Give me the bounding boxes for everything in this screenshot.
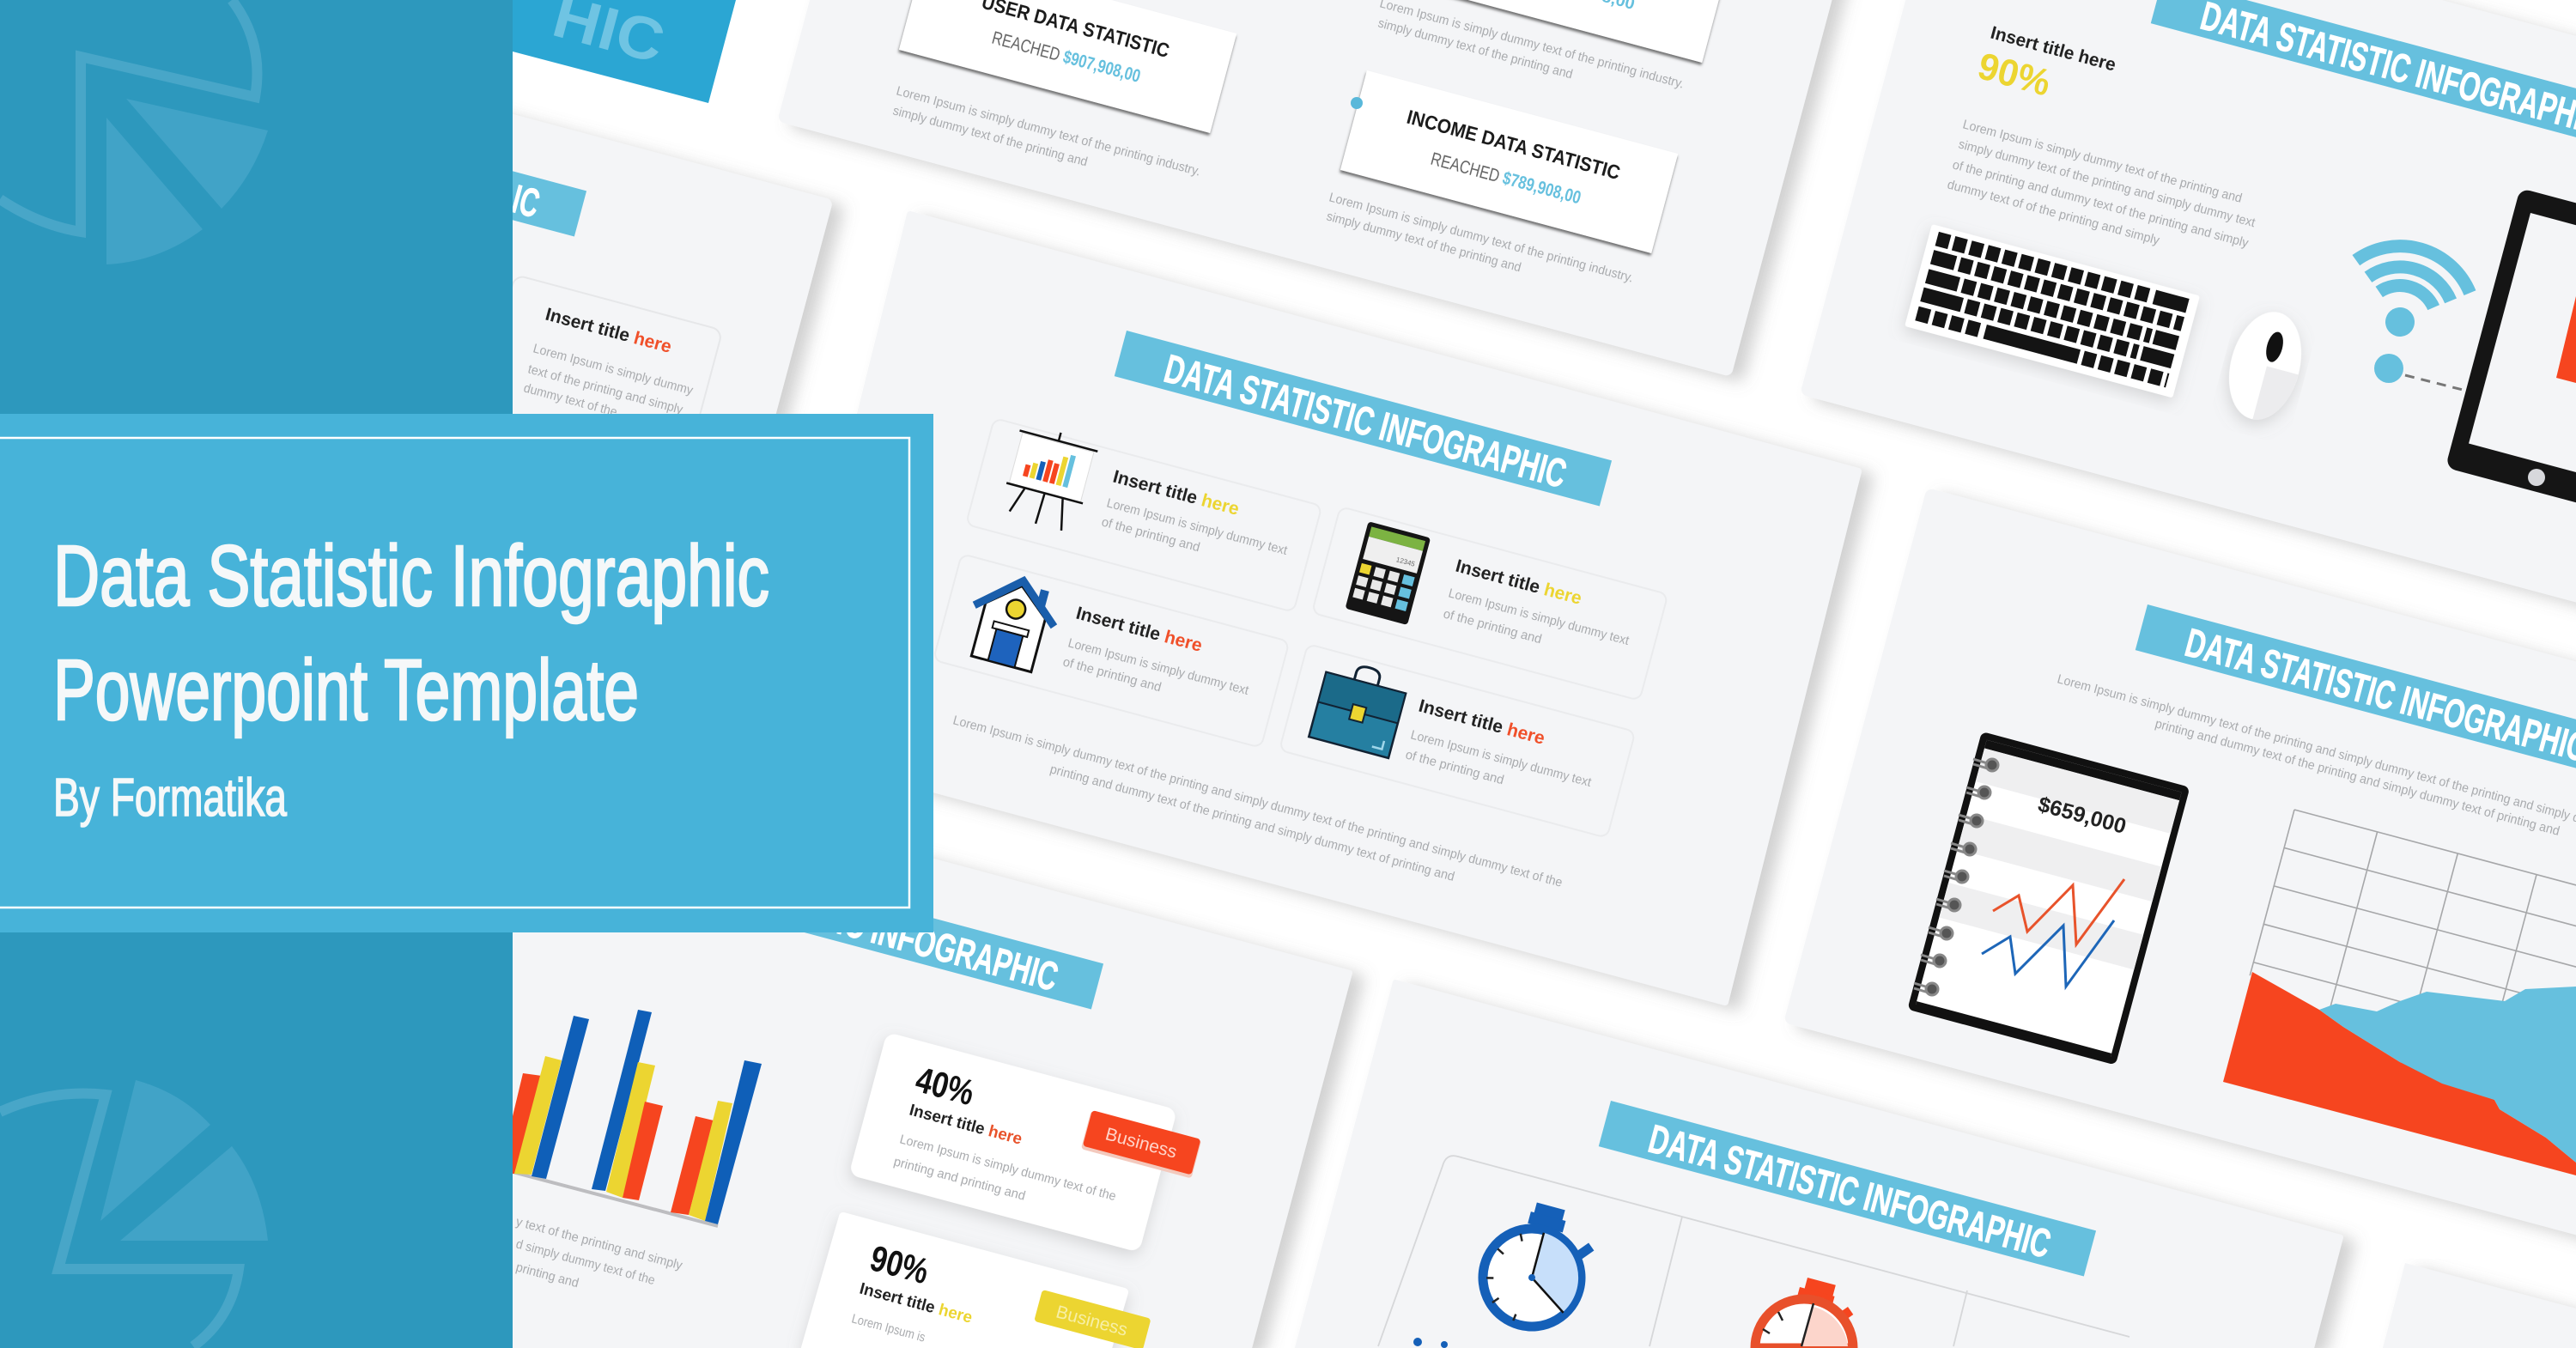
icon: tablet xyxy=(2445,188,2576,579)
body text: Lorem Ipsum is simply dummy text of the printing industry. xyxy=(895,83,1202,179)
banner xyxy=(1115,331,1612,507)
card 2: calculator: Insert title here xyxy=(1454,556,1584,609)
card: income data: REACHED $789,908,00 xyxy=(1429,149,1583,208)
card: 40%: printing and printing and xyxy=(892,1154,1027,1204)
button: business yellow xyxy=(1034,1290,1151,1348)
paragraph xyxy=(1946,117,2257,251)
connector dot and dashed line xyxy=(2374,354,2463,390)
body text: simply dummy text of the printing and xyxy=(1376,15,1574,82)
icon: stopwatch red xyxy=(1755,1278,1853,1348)
slide: notebook and area chart xyxy=(1783,488,2576,1274)
icon: calculator: 12345 xyxy=(1395,556,1416,568)
banner: DATA STATISTIC INFOGRAPHIC xyxy=(1160,345,1571,496)
button: business red: Business xyxy=(1103,1124,1179,1163)
icon: keyboard xyxy=(1905,224,2200,398)
banner: DATA STATISTIC INFOGRAPHIC xyxy=(1644,1115,2056,1266)
chart caption: printing and xyxy=(514,1260,580,1290)
stat title: Insert title here xyxy=(1989,23,2118,76)
button: business red xyxy=(1081,1110,1202,1179)
card 2: calculator: Lorem Ipsum is simply dummy text xyxy=(1447,586,1631,648)
left column xyxy=(0,0,513,1348)
banner xyxy=(1599,1101,2096,1278)
paragraph: printing and dummy text of the printing and simply dummy text of printing and xyxy=(2154,716,2561,839)
card 1: presentation: of the printing and xyxy=(1100,514,1201,555)
byline: By Formatika xyxy=(53,768,287,828)
body text: simply dummy text of the printing and xyxy=(1325,209,1522,275)
amount: $659,000 xyxy=(2035,792,2129,839)
card: user data: REACHED $907,908,00 xyxy=(990,28,1143,87)
slide: center, four cards xyxy=(777,215,1858,1002)
icon: house xyxy=(962,570,1063,675)
banner: DATA STATISTIC INFOGRAPHIC xyxy=(652,848,1063,999)
paragraph: simply dummy text of the printing and simply dummy text xyxy=(1957,137,2257,230)
banner xyxy=(606,834,1103,1011)
banner: IC xyxy=(507,176,544,227)
area blue xyxy=(2319,987,2576,1163)
decoration: top pie chart xyxy=(0,0,268,264)
card outline xyxy=(459,275,722,537)
card: 40% xyxy=(848,1032,1202,1253)
card: income data: INCOME DATA STATISTIC xyxy=(1405,106,1623,184)
icon: easel xyxy=(998,422,1100,534)
chart caption: y text of the printing and simply xyxy=(514,1214,684,1273)
paragraph: Lorem Ipsum is simply dummy text of the printing and xyxy=(1961,117,2244,206)
area chart xyxy=(2223,810,2576,1175)
icon: notebook xyxy=(1911,736,2186,1061)
chart caption: d simply dummy text of the xyxy=(514,1236,657,1288)
card: 40%: Insert title here xyxy=(908,1102,1024,1149)
body text: simply dummy text of the printing and xyxy=(891,103,1089,169)
slide: top middle, statistic cards xyxy=(777,0,1873,377)
icon: mouse xyxy=(2218,304,2312,428)
card 3: house xyxy=(933,554,1290,748)
bar chart xyxy=(513,1010,762,1226)
label fragment xyxy=(1413,1338,1448,1348)
card 4: briefcase: Lorem Ipsum is simply dummy text xyxy=(1409,727,1594,790)
card 4: briefcase: Insert title here xyxy=(1417,696,1547,749)
title: Powerpoint Template xyxy=(53,642,639,738)
card: income data xyxy=(1340,70,1678,253)
card text: dummy text of the xyxy=(522,380,619,420)
title xyxy=(53,528,769,738)
card 3: house: Lorem Ipsum is simply dummy text xyxy=(1066,635,1251,698)
card 2: calculator xyxy=(1312,507,1668,701)
card 3: house: of the printing and xyxy=(1061,654,1163,695)
card 4: briefcase xyxy=(1279,644,1636,838)
card 1: presentation: Insert title here xyxy=(1111,467,1242,519)
icon: briefcase xyxy=(1309,657,1410,758)
icon: wifi xyxy=(2339,233,2478,352)
line chart red xyxy=(1993,879,2124,944)
paragraph: dummy text of of the printing and simply xyxy=(1946,177,2161,248)
card: 40%: 40% xyxy=(912,1059,979,1113)
table outline xyxy=(1378,1156,2129,1346)
title panel xyxy=(0,414,933,932)
card text xyxy=(522,305,695,420)
card: 40%: Lorem Ipsum is simply dummy text of the xyxy=(898,1132,1118,1204)
line chart blue xyxy=(1982,920,2114,987)
card: 90%: 90% xyxy=(866,1237,933,1291)
paragraph: Lorem Ipsum is simply dummy text of the printing and simply dummy text of the printing and simply dummy text of the xyxy=(951,713,1564,890)
slide: left slide with title card xyxy=(0,0,833,728)
title: Data Statistic Infographic xyxy=(53,528,769,624)
icon: calculator xyxy=(1346,521,1431,625)
card 3: house: Insert title here xyxy=(1074,604,1205,656)
body text xyxy=(891,0,1686,286)
card text: Lorem Ipsum is simply dummy xyxy=(532,341,695,398)
paragraph: printing and dummy text of the printing and simply dummy text of printing and xyxy=(1048,762,1456,884)
card 1: presentation xyxy=(966,418,1322,612)
spiral rings xyxy=(1914,759,1998,995)
slide: bottom right corner xyxy=(2383,1263,2576,1348)
decoration: bottom pie chart xyxy=(0,1080,268,1346)
card: top right xyxy=(1391,0,1728,63)
card: 90% xyxy=(805,1217,1151,1348)
banner xyxy=(89,61,586,238)
card text: text of the printing and simply xyxy=(526,361,684,417)
slide: bar chart and percentage cards xyxy=(243,721,1350,1348)
card 2: calculator: of the printing and xyxy=(1442,606,1543,647)
slide: stopwatches xyxy=(1297,982,2341,1348)
card: user data xyxy=(899,0,1236,133)
paragraph: of the printing and dummy text of the printing and simply xyxy=(1951,157,2251,251)
card: 90%: Lorem Ipsum is xyxy=(850,1311,927,1345)
icon: stopwatch blue xyxy=(1472,1193,1602,1339)
slide: blue banner fragment top left xyxy=(513,0,736,103)
button: business yellow: Business xyxy=(1054,1302,1130,1340)
area red xyxy=(2223,972,2576,1175)
slide: keyboard and tablet xyxy=(1800,0,2576,646)
card: 90%: Insert title here xyxy=(858,1280,975,1327)
body text: Lorem Ipsum is simply dummy text of the printing industry. xyxy=(1327,190,1635,286)
card text: Insert title here xyxy=(544,305,674,357)
chart grid xyxy=(2227,810,2576,1151)
card 1: presentation: Lorem Ipsum is simply dummy text xyxy=(1105,495,1290,558)
card 4: briefcase: of the printing and xyxy=(1404,747,1505,787)
banner xyxy=(2136,604,2576,781)
stat value: 90% xyxy=(1973,45,2055,105)
